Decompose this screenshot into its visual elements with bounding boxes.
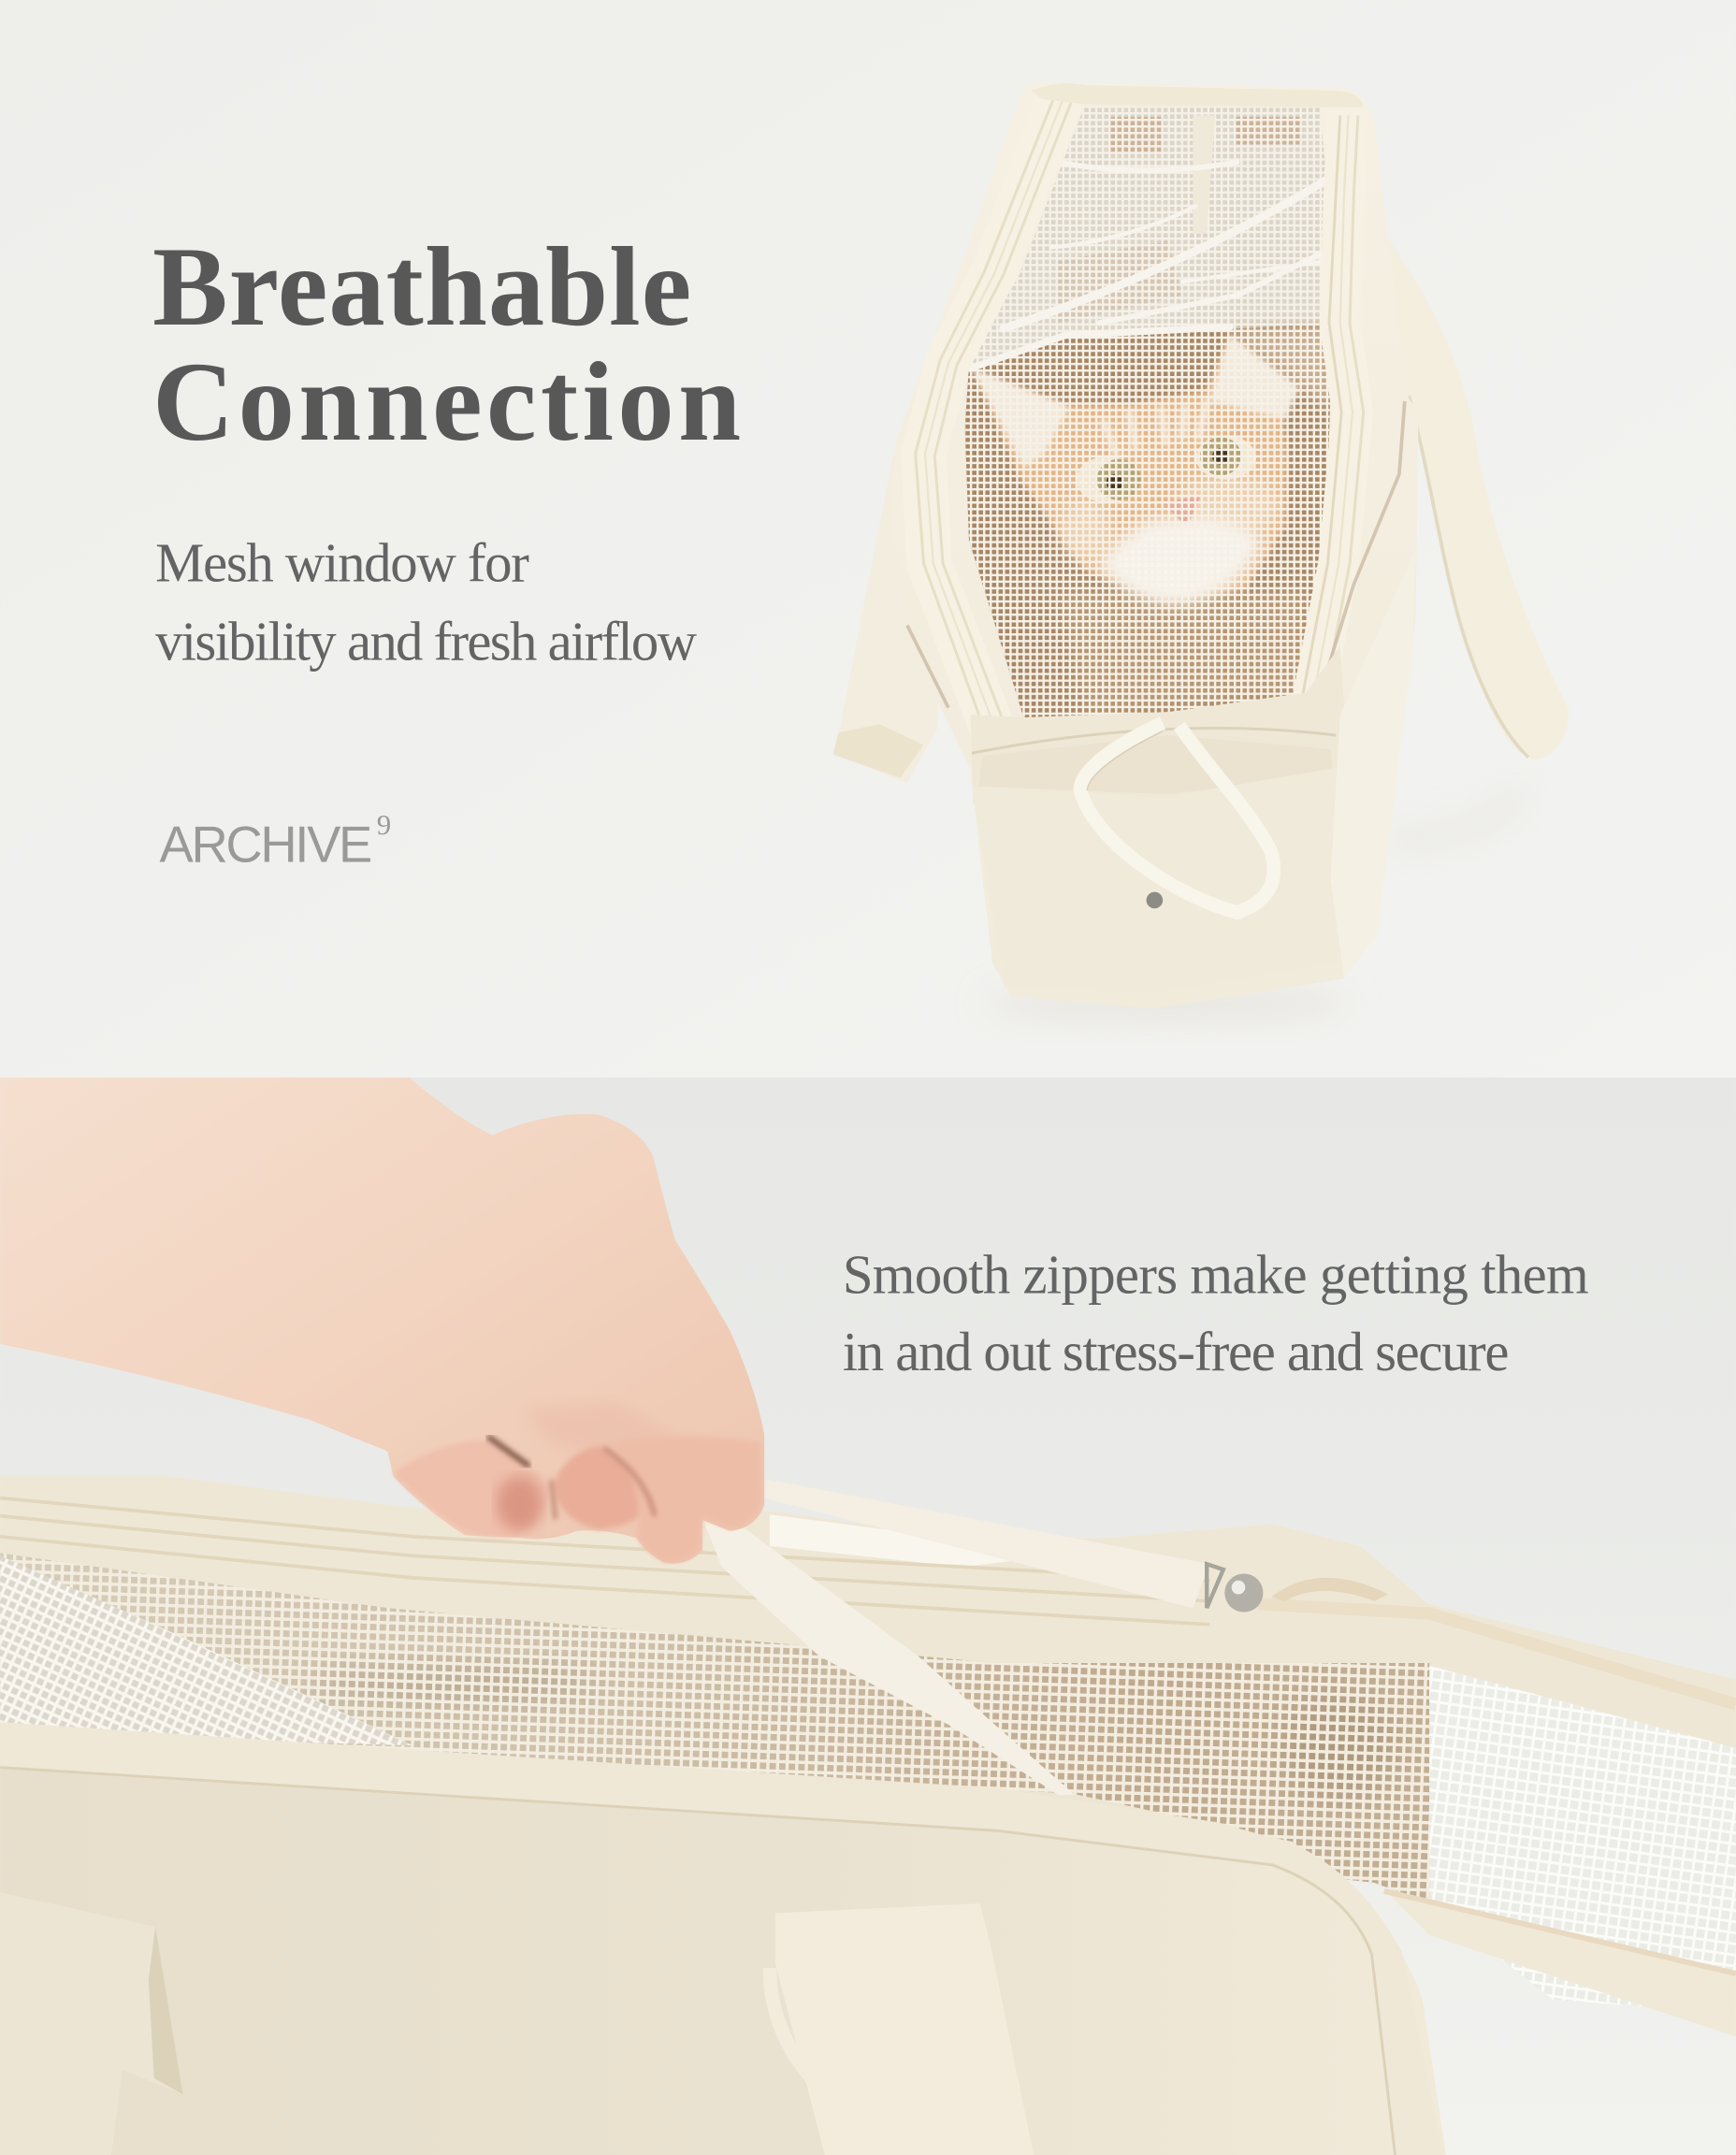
right handle inner edge bbox=[1409, 396, 1528, 758]
hand bbox=[0, 1078, 764, 1564]
panel: top bag photo with cat bbox=[833, 81, 1569, 1020]
rim seam bbox=[0, 1768, 1396, 2155]
top rim bbox=[1031, 83, 1364, 108]
heading: Breathable bbox=[152, 225, 691, 350]
cat behind mesh bbox=[965, 106, 1330, 717]
loop ribbon edge bbox=[1087, 731, 1163, 790]
left handle tab bbox=[0, 1892, 183, 2155]
bag soft shadow bbox=[1027, 991, 1312, 1020]
subheading: mesh window: Mesh window for bbox=[155, 533, 529, 594]
zipper tape right bbox=[1258, 1604, 1736, 1704]
zipper ribbon near bbox=[702, 1517, 1075, 1795]
front collar bbox=[970, 646, 1347, 804]
zipper metal pull bbox=[1207, 1564, 1263, 1613]
mesh dark interior bbox=[0, 1553, 1429, 1903]
zipper band: right bbox=[1302, 110, 1364, 701]
heading: Connection bbox=[152, 340, 741, 465]
mesh grid bbox=[948, 82, 1347, 729]
heading bbox=[152, 225, 741, 465]
background: top panel bbox=[0, 0, 1736, 1078]
front canvas rim bbox=[0, 1722, 1443, 2155]
mesh clear right side bbox=[1429, 1666, 1736, 2014]
caption: smooth zippers: Smooth zippers make getting them bbox=[843, 1245, 1589, 1306]
collar seam bbox=[972, 728, 1336, 753]
right handle bbox=[1374, 226, 1569, 760]
finger: index bbox=[393, 1440, 548, 1537]
cat forehead stripes bbox=[1104, 401, 1207, 454]
zipper ribbon far bbox=[764, 1479, 1209, 1608]
bag side right bbox=[1330, 550, 1416, 978]
zipper tracks bbox=[0, 1498, 1209, 1625]
cat head bbox=[975, 336, 1288, 602]
upper right interior lighter bbox=[1223, 323, 1333, 412]
cat muzzle bbox=[1100, 517, 1262, 605]
bag body bbox=[890, 81, 1418, 1009]
pull loop ribbon bbox=[1080, 723, 1274, 913]
strap zipper edge bbox=[1384, 1891, 1736, 1974]
finger: ring bbox=[612, 1437, 761, 1562]
mesh interior dark patches bbox=[302, 1667, 1396, 1798]
finger shadow bbox=[489, 1438, 528, 1465]
left seam brown bbox=[907, 626, 948, 708]
inner seam brown bbox=[1326, 401, 1405, 673]
bag side shading bbox=[1340, 618, 1409, 978]
caption: smooth zippers: in and out stress-free and secure bbox=[843, 1322, 1509, 1382]
mesh interior bbox=[973, 106, 1324, 363]
cat ears bbox=[972, 336, 1299, 468]
right outer strap bbox=[1384, 1889, 1736, 2037]
subheading: mesh window: visibility and fresh airflow bbox=[155, 611, 698, 672]
carrier interior bbox=[962, 323, 1333, 729]
pocket shadow bbox=[978, 735, 1333, 794]
front canvas body bbox=[0, 1734, 1446, 2155]
lower interior lighter bbox=[1059, 591, 1306, 715]
left handle fold bbox=[833, 724, 924, 778]
cat cheek highlights bbox=[1061, 475, 1280, 559]
left handle bbox=[833, 454, 948, 784]
back band of bag bbox=[0, 1476, 1736, 1773]
eyelet bbox=[1147, 892, 1163, 908]
logo: ARCHIVE 9: ARCHIVE bbox=[160, 816, 372, 873]
folded white mesh bbox=[0, 1555, 412, 1745]
mesh centre strap bbox=[1194, 115, 1215, 234]
zipper band: left bbox=[916, 91, 1074, 729]
hand and arm bbox=[0, 1078, 764, 1564]
mesh clear right grid bbox=[1429, 1666, 1736, 2014]
highlight under ribbon bbox=[770, 1514, 1107, 1567]
handle ring stitch bbox=[770, 1968, 841, 2107]
interior tan patches bbox=[1059, 117, 1300, 323]
cat eyes bbox=[1077, 436, 1256, 503]
fingertip index bbox=[497, 1476, 542, 1531]
pocket bbox=[972, 767, 1344, 992]
subheading: mesh window bbox=[155, 533, 698, 672]
mesh grid bbox=[0, 1553, 1429, 1903]
finger: middle bbox=[554, 1446, 650, 1529]
zipper arch bbox=[1271, 1578, 1388, 1601]
left tab fold shadow bbox=[149, 1927, 183, 2094]
logo: ARCHIVE 9: 9 bbox=[377, 809, 391, 841]
background: bottom panel bbox=[0, 1078, 1736, 2155]
cat nose bbox=[1163, 495, 1201, 522]
finger creases bbox=[551, 1449, 655, 1517]
palm shadow bbox=[522, 1402, 687, 1470]
centre handle tab bbox=[775, 1903, 1034, 2155]
folded mesh grid bbox=[0, 1555, 412, 1745]
mesh fold creases bbox=[970, 162, 1333, 369]
caption: smooth zippers bbox=[843, 1245, 1589, 1382]
panel: bottom zipper photo bbox=[0, 1078, 1736, 2155]
